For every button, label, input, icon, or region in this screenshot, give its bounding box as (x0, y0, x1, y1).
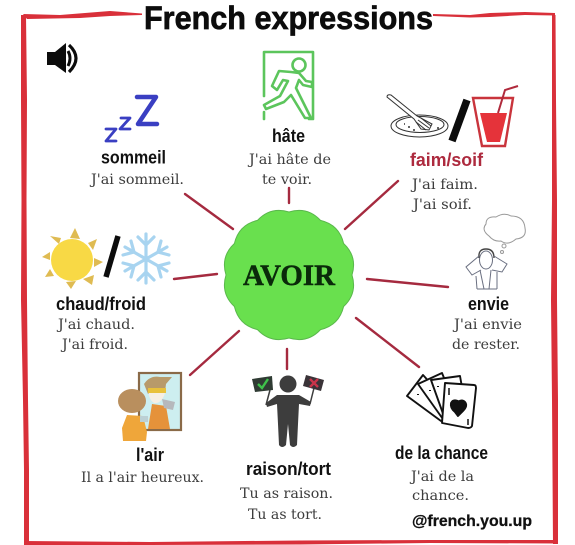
text: J'ai hâte de te voir.: J'ai hâte de (247, 152, 331, 168)
text: J'ai chaud. J'ai froid.: J'ai chaud. (56, 317, 135, 333)
group: hâte (247, 52, 331, 188)
group: de la chance (395, 373, 488, 504)
icon: person with signs (252, 375, 324, 447)
text: Tu as raison. Tu as tort.: Tu as tort. (248, 507, 322, 523)
label: hâte: hâte (272, 125, 305, 146)
label: envie: envie (468, 293, 509, 314)
group: chaud/froid (42, 228, 169, 353)
title: French expressions (144, 0, 433, 36)
group: faim/soif (387, 86, 518, 213)
text: Tu as raison. Tu as tort. (240, 486, 333, 523)
label: sommeil: sommeil (101, 146, 166, 168)
group: sommeil (89, 97, 184, 188)
icon: red drink (473, 86, 518, 146)
icon: playing cards (407, 373, 476, 428)
icon: person at mirror (118, 373, 181, 441)
text: J'ai faim. J'ai soif.: J'ai faim. (410, 177, 478, 193)
label: chaud/froid: chaud/froid (56, 293, 146, 314)
text: J'ai faim. J'ai soif. (410, 177, 478, 213)
text: J'ai envie de rester. (452, 317, 522, 353)
text: J'ai de la chance.: J'ai de la (409, 469, 474, 485)
icon: person thinking (466, 214, 525, 289)
label: l'air: l'air (136, 444, 164, 465)
text: J'ai chaud. J'ai froid.: J'ai froid. (60, 337, 128, 353)
icon: plate and fork (387, 95, 448, 137)
text: J'ai hâte de te voir. (247, 152, 331, 188)
group: raison/tort (240, 375, 333, 523)
group: l'air (81, 373, 204, 486)
label: de la chance: de la chance (395, 442, 488, 463)
text: J'ai de la chance.: chance. (412, 488, 469, 504)
icon: running exit (264, 52, 313, 119)
text: J'ai de la chance. (409, 469, 474, 504)
icon: speaker (47, 43, 76, 73)
connector lines from center to expressions (174, 181, 448, 375)
icon: sun (42, 228, 103, 289)
text: J'ai faim. J'ai soif.: J'ai soif. (411, 197, 472, 213)
text: Tu as raison. Tu as tort.: Tu as raison. (240, 486, 333, 502)
text: J'ai envie de rester.: de rester. (452, 337, 520, 353)
text: J'ai envie de rester.: J'ai envie (452, 317, 522, 333)
icon: zzz (106, 97, 157, 141)
text: J'ai hâte de te voir.: te voir. (262, 172, 312, 188)
credit: @french.you.up: @french.you.up (412, 513, 532, 530)
text: Il a l'air heureux.: Il a l'air heureux. (81, 470, 204, 486)
text: J'ai chaud. J'ai froid. (56, 317, 135, 353)
label: raison/tort: raison/tort (246, 458, 331, 479)
slash (106, 236, 118, 277)
center badge: AVOIR (224, 210, 354, 340)
text: J'ai sommeil.: J'ai sommeil. (89, 172, 184, 188)
icon: snowflake (123, 234, 169, 283)
group: envie (452, 214, 525, 353)
slash (452, 100, 467, 141)
label: faim/soif: faim/soif (410, 149, 484, 170)
center badge: AVOIR: AVOIR (243, 259, 335, 292)
